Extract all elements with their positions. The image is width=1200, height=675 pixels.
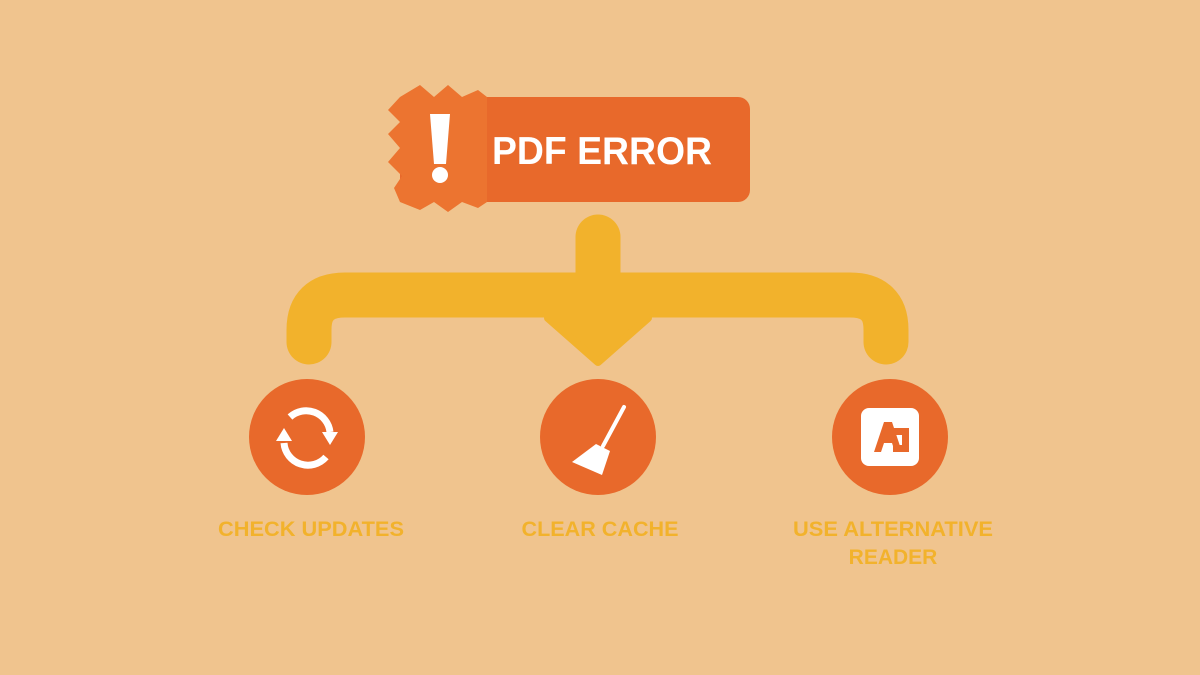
icon: reader app <box>861 408 919 466</box>
step: use alternative reader: READER <box>849 546 937 569</box>
icon: jagged warning badge <box>388 85 487 212</box>
connector arrow <box>309 237 886 362</box>
heading text: PDF ERROR <box>492 130 712 173</box>
step: use alternative reader: USE ALTERNATIVE <box>793 518 993 541</box>
banner: PDF error <box>388 85 750 212</box>
step: clear cache: CLEAR CACHE <box>522 518 678 541</box>
step: check updates <box>218 379 404 541</box>
step: clear cache <box>522 379 678 541</box>
icon: broom <box>572 407 624 475</box>
step: use alternative reader <box>793 379 993 569</box>
step: check updates: CHECK UPDATES <box>218 518 404 541</box>
icon: refresh <box>276 411 338 465</box>
